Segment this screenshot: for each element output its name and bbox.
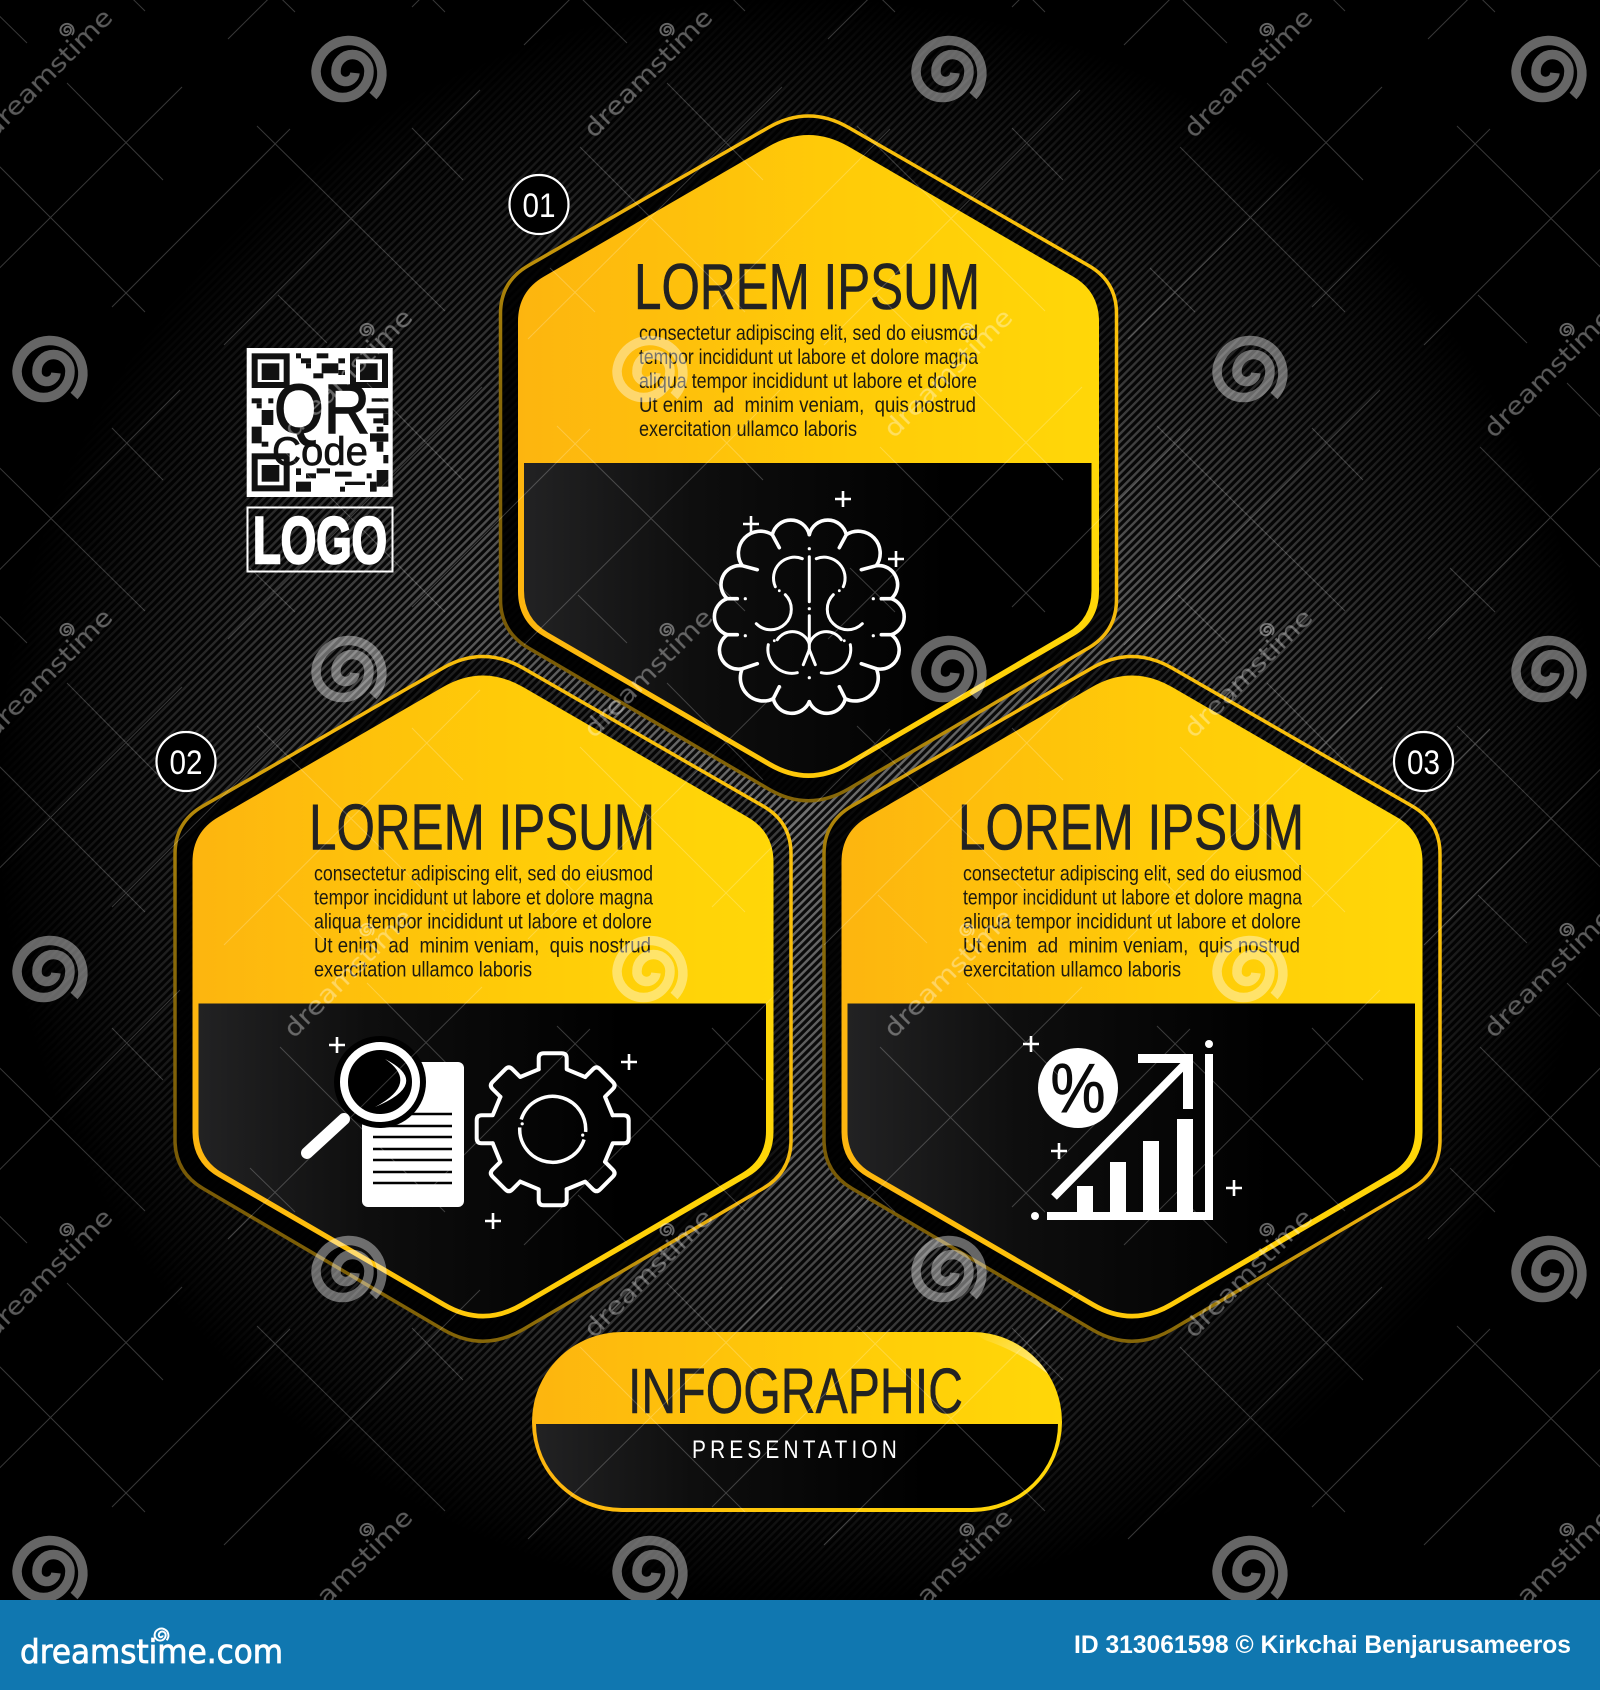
body text 02: consectetur adipiscing elit, sed do eiusmod <box>314 862 653 886</box>
number badge 03: 03 <box>1407 744 1440 782</box>
watermark overlay: dreamstime <box>878 903 1018 1043</box>
body text 01: exercitation ullamco laboris <box>639 418 857 441</box>
body text 02 <box>314 862 653 982</box>
body text 03: tempor incididunt ut labore et dolore magna <box>963 886 1302 910</box>
footer bar <box>0 1600 1600 1690</box>
icon: percent growth chart: % <box>1050 1049 1106 1127</box>
pill title: INFOGRAPHIC <box>628 1355 963 1427</box>
watermark overlay: dreamstime <box>578 603 718 743</box>
heading 02: LOREM IPSUM <box>309 790 655 864</box>
body text 01: aliqua tempor incididunt ut labore et dolore <box>639 370 977 393</box>
footer brand: dreamstime.com <box>20 1632 283 1671</box>
hexagon panel 03 <box>824 656 1440 1341</box>
number badge 02: 02 <box>170 744 202 782</box>
body text 01: tempor incididunt ut labore et dolore magna <box>639 346 978 369</box>
icon: gear <box>476 1053 629 1206</box>
watermark overlay: dreamstime <box>878 303 1018 443</box>
icon: percent growth chart <box>1031 1040 1213 1220</box>
QR code: Code <box>272 430 368 474</box>
sparkles 01 <box>743 491 904 567</box>
watermark overlay: dreamstime <box>278 1503 418 1643</box>
watermark overlay: dreamstime <box>1178 3 1318 143</box>
QR code: QR <box>274 370 370 448</box>
body text 03: Ut enim ad minim veniam, quis nostrud <box>963 934 1300 958</box>
body text 02: tempor incididunt ut labore et dolore magna <box>314 886 653 910</box>
QR code <box>247 348 393 497</box>
watermark overlay: dreamstime <box>1178 603 1318 743</box>
hexagon panel 01 <box>500 116 1116 801</box>
body text 03: consectetur adipiscing elit, sed do eiusmod <box>963 862 1302 886</box>
heading 01: LOREM IPSUM <box>634 250 980 323</box>
sparkles 02 <box>329 1037 637 1229</box>
body text 01 <box>639 322 978 441</box>
footer credit: ID 313061598 © Kirkchai Benjarusameeros <box>1074 1631 1571 1659</box>
body text 01: consectetur adipiscing elit, sed do eiusmod <box>639 322 978 345</box>
sparkles 03 <box>1023 1036 1242 1196</box>
watermark overlay: dreamstime <box>578 1203 718 1343</box>
body text 01: Ut enim ad minim veniam, quis nostrud <box>639 394 976 417</box>
title pill <box>532 1332 1062 1512</box>
body text 03 <box>963 862 1302 982</box>
body text 03: aliqua tempor incididunt ut labore et dolore <box>963 910 1301 934</box>
icon: magnifier over document <box>307 1036 464 1207</box>
heading 03: LOREM IPSUM <box>958 790 1304 864</box>
body text 03: exercitation ullamco laboris <box>963 958 1181 982</box>
number badge 01: 01 <box>522 187 556 225</box>
number badge 01 <box>510 175 568 234</box>
watermark overlay: dreamstime <box>1178 1203 1318 1343</box>
body text 02: Ut enim ad minim veniam, quis nostrud <box>314 934 651 958</box>
hexagon panel 02 <box>175 656 791 1341</box>
logo box: LOGO <box>253 503 387 577</box>
body text 02: aliqua tempor incididunt ut labore et dolore <box>314 910 652 934</box>
watermark overlay: dreamstime <box>878 1503 1018 1643</box>
watermark overlay: dreamstime <box>278 903 418 1043</box>
logo box <box>248 503 392 577</box>
number badge 02 <box>156 732 216 791</box>
watermark overlay: dreamstime <box>578 3 718 143</box>
icon: brain <box>714 520 904 713</box>
number badge 03 <box>1394 732 1453 791</box>
watermark overlay: dreamstime <box>278 303 418 443</box>
body text 02: exercitation ullamco laboris <box>314 958 532 982</box>
pill subtitle: PRESENTATION <box>692 1436 901 1464</box>
